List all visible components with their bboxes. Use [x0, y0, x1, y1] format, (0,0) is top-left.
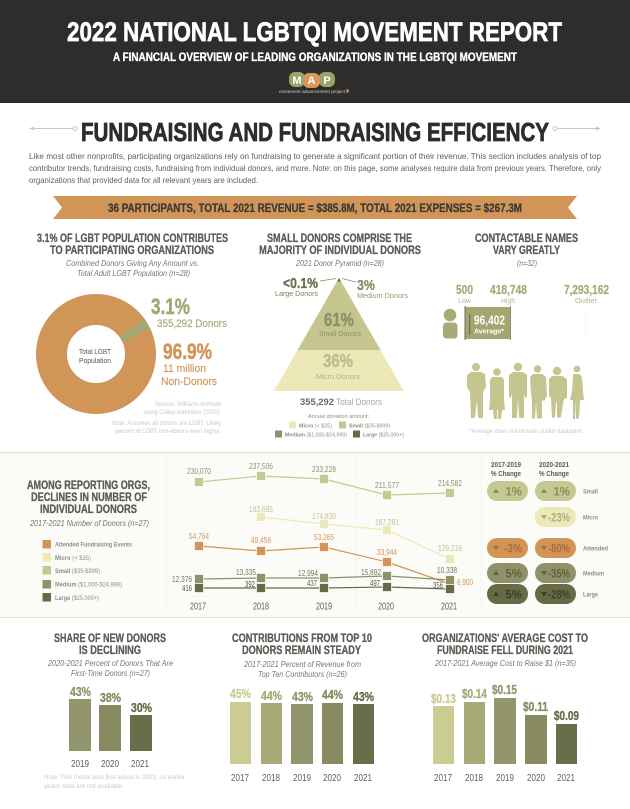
heading [37, 233, 228, 278]
pill row: large: 5% [505, 590, 522, 602]
pill row: small: 1% [505, 486, 522, 498]
pyramid chart: Small Donors [319, 329, 361, 338]
legend [42, 540, 132, 602]
heading: FUNDRAISE FELL DURING 2021 [437, 645, 573, 657]
bar chart: 2017 [434, 773, 452, 784]
heading: Total Adult LGBT Population (n=28) [77, 268, 190, 278]
series: large donors: 497 [370, 579, 380, 588]
heading: CONTACTABLE NAMES [475, 233, 578, 245]
pill row: small: 1% [553, 486, 570, 498]
bar chart: 2019 [71, 759, 89, 770]
heading: 2017-2021 Average Cost to Raise $1 (n=35) [434, 658, 576, 668]
icon: person [443, 309, 458, 338]
pill row: small [487, 481, 598, 501]
pyramid chart: Micro Donors [316, 372, 360, 381]
pill row: micro: -23% [548, 512, 570, 524]
percent change pills: 2017-2019 [491, 460, 521, 469]
legend: Micro (< $35) [55, 555, 91, 562]
footnote: *Average does not include outlier datapoint. [469, 428, 583, 435]
pyramid chart: <0.1% [283, 275, 318, 292]
pill row: attended: -80% [548, 544, 570, 556]
series: medium donors: 10,338 [437, 566, 457, 575]
heading: TO PARTICIPATING ORGANIZATIONS [50, 245, 214, 257]
heading: 3.1% OF LGBT POPULATION CONTRIBUTES [37, 233, 228, 245]
percent change pills [487, 460, 608, 604]
series: attended fundraising events: 6,900 [457, 578, 473, 587]
bar chart [69, 684, 152, 770]
low high outlier figures: High [501, 296, 515, 305]
series: small donors [187, 462, 462, 500]
series: micro donors: 174,839 [312, 512, 336, 521]
bar chart: 38% [100, 690, 121, 705]
bar chart: $0.13 [431, 691, 456, 706]
pyramid legend [275, 414, 404, 438]
bar chart: 2020 [527, 773, 545, 784]
series: small donors: 211,577 [375, 481, 399, 490]
donor figures: Non-Donors [161, 376, 217, 388]
heading: ORGANIZATIONS' AVERAGE COST TO [422, 633, 588, 645]
x axis years [190, 602, 457, 612]
bar chart: 2019 [293, 773, 311, 784]
heading: VARY GREATLY [493, 245, 560, 257]
logo: MAP: M [292, 75, 302, 87]
series: micro donors [249, 505, 462, 564]
bar chart: 45% [230, 686, 251, 701]
intro paragraph: Like most other nonprofits, participating organizations rely on fundraising to generate a significant portion of their revenue. This section includes analysis of top [29, 151, 601, 161]
low high outlier figures [456, 282, 609, 305]
percent change pills: % Change [539, 469, 569, 478]
icon: six people silhouettes [467, 363, 584, 419]
series: medium donors [172, 566, 457, 584]
note: Note: This metric was first asked in 2019, so earlier [44, 774, 186, 781]
heading: Combined Donors Giving Any Amount vs. [66, 258, 199, 268]
heading: CONTRIBUTIONS FROM TOP 10 [232, 633, 372, 645]
ribbon banner: 36 PARTICIPANTS, TOTAL 2021 REVENUE = $385.8M, TOTAL 2021 EXPENSES = $267.3M [108, 201, 522, 215]
pyramid chart: 3% [357, 277, 375, 294]
subtitle: A FINANCIAL OVERVIEW OF LEADING ORGANIZATIONS IN THE LGBTQI MOVEMENT [113, 52, 517, 64]
average bar: 96,402 [474, 314, 505, 328]
series: small donors: 237,506 [249, 462, 273, 471]
heading: 2017-2021 Number of Donors (n=27) [29, 518, 149, 528]
pyramid legend: Medium ($1,000-$24,999) [285, 432, 347, 438]
intro paragraph: organizations that provided data for all relevant years are included. [29, 175, 258, 185]
donor figures: 11 million [163, 363, 206, 375]
series: attended fundraising events: 54,764 [189, 532, 209, 541]
pyramid chart: 61% [324, 310, 354, 330]
x axis years: 2019 [316, 602, 332, 612]
pill row: attended: Attended [583, 546, 608, 552]
heading: SMALL DONORS COMPRISE THE [267, 233, 412, 245]
line chart [172, 462, 473, 612]
donor figures: 96.9% [163, 339, 212, 364]
pill row: large [487, 584, 598, 604]
x axis years: 2020 [378, 602, 394, 612]
bar chart: 2017 [231, 773, 249, 784]
bar chart: 2020 [101, 759, 119, 770]
heading [475, 233, 578, 268]
note [44, 774, 186, 790]
ribbon banner [53, 196, 577, 219]
pill row: micro: Micro [583, 514, 598, 522]
series: medium donors: 13,335 [236, 568, 256, 577]
series: small donors: 230,070 [187, 467, 211, 476]
bar chart: 2018 [262, 773, 280, 784]
low high outlier figures: 7,293,162 [564, 282, 609, 297]
series: micro donors: 167,281 [375, 518, 399, 527]
series: micro donors: 129,216 [438, 544, 462, 553]
pyramid legend: Annual donation amount: [308, 414, 369, 420]
pill row: attended [487, 538, 608, 558]
series: micro donors: 183,695 [249, 505, 273, 514]
bar chart: $0.15 [492, 682, 517, 697]
donut chart [52, 310, 150, 398]
pill row: medium: -35% [548, 568, 570, 580]
intro paragraph [29, 151, 602, 185]
series: attended fundraising events: 53,265 [314, 533, 334, 542]
pyramid chart: Total Donors [336, 397, 382, 408]
panel: share of new donors [44, 633, 186, 790]
heading: DECLINES IN NUMBER OF [31, 492, 147, 504]
pill row: large: -28% [548, 590, 570, 602]
heading: (n=32) [517, 258, 537, 268]
header band [0, 0, 630, 103]
legend: Large ($25,000+) [55, 595, 99, 602]
pyramid legend: Large ($25,000+) [363, 432, 404, 438]
pill row: large: Large [583, 592, 598, 598]
series: medium donors: 12,994 [298, 569, 318, 578]
heading: First-Time Donors (n=27) [71, 668, 150, 678]
x axis years: 2017 [190, 602, 206, 612]
pyramid chart: Large Donors [275, 289, 318, 298]
percent change pills: 2020-2021 [539, 460, 569, 469]
heading: 2017-2021 Percent of Revenue from [243, 659, 361, 669]
heading [232, 633, 372, 679]
legend: Small ($35-$999) [55, 568, 100, 575]
series: medium donors: 12,376 [172, 575, 192, 584]
source note: using Gallup estimates (2020). [144, 409, 221, 416]
heading: 2020-2021 Percent of Donors That Are [47, 658, 173, 668]
series: large donors: 392 [245, 580, 255, 589]
donor figures: 3.1% [151, 294, 190, 319]
pyramid chart: 355,292 [300, 397, 334, 408]
panel: donor pyramid [259, 233, 421, 438]
logo: MAP [279, 72, 350, 94]
bar chart: 2021 [354, 773, 372, 784]
bar chart: 43% [292, 689, 313, 704]
low high outlier figures: Low [458, 296, 472, 305]
bar chart: 2020 [323, 773, 341, 784]
donut chart: Total LGBT [79, 347, 111, 356]
heading: IS DECLINING [79, 645, 141, 657]
donut chart: Population [79, 356, 111, 365]
pill row: medium [487, 563, 604, 583]
heading [27, 480, 150, 528]
source note: Source: Williams Institute [155, 401, 221, 408]
pyramid legend: Small ($35-$999) [349, 424, 390, 430]
bar chart: 43% [70, 684, 91, 699]
low high outlier figures: 500 [456, 282, 473, 297]
bar chart: 2018 [465, 773, 483, 784]
x axis years: 2021 [441, 602, 457, 612]
panel: top 10 donor contributions [230, 633, 374, 784]
bar chart: 2019 [496, 773, 514, 784]
low high outlier figures: Outlier [575, 296, 597, 305]
bar chart: 30% [131, 700, 152, 715]
bar chart [230, 686, 374, 784]
legend: Medium ($1,000-$24,999) [55, 582, 122, 588]
bar chart: 44% [261, 688, 282, 703]
pyramid chart: Medium Donors [357, 291, 408, 300]
donor figures: 355,292 Donors [157, 318, 227, 330]
logo: MAP: P [323, 75, 331, 87]
series: large donors: 437 [307, 579, 317, 588]
pyramid legend: Micro (< $35) [299, 424, 332, 430]
series: attended fundraising events [189, 532, 473, 587]
panel: contactable names [443, 233, 609, 435]
heading: 2021 Donor Pyramid (n=28) [295, 258, 384, 268]
note: years' data are not available. [44, 783, 124, 790]
bar chart: $0.09 [554, 708, 579, 723]
heading: SHARE OF NEW DONORS [54, 633, 166, 645]
series: large donors [182, 579, 454, 594]
x axis years: 2018 [253, 602, 269, 612]
bar chart: 2021 [131, 759, 149, 770]
donor figures [151, 294, 227, 388]
panel: number of individual donors [0, 452, 630, 618]
low high outlier figures: 418,748 [490, 282, 527, 297]
heading [47, 633, 173, 678]
average bar [464, 306, 586, 340]
series: large donors: 356 [433, 581, 443, 590]
heading: AMONG REPORTING ORGS, [27, 480, 150, 492]
bar chart: 43% [353, 689, 374, 704]
legend: Attended Fundraising Events [55, 542, 132, 548]
logo: MAP: A [308, 75, 316, 87]
pyramid chart [274, 275, 408, 408]
pill row: medium: Medium [583, 570, 604, 578]
source note [112, 401, 222, 435]
heading [422, 633, 588, 668]
series: small donors: 233,228 [312, 465, 336, 474]
pill row: micro [535, 507, 598, 527]
source note: percent of LGBT non-donors even higher. [115, 428, 221, 435]
pill row: small: Small [583, 488, 598, 496]
source note: Note: Assumes all donors are LGBT. Likely [112, 420, 222, 427]
average bar: Average* [474, 326, 504, 336]
panel: LGBT population donut [37, 233, 228, 435]
logo: MAP: movement advancement project [279, 89, 346, 94]
pyramid chart: 36% [323, 351, 353, 371]
series: attended fundraising events: 33,944 [377, 548, 397, 557]
series: attended fundraising events: 49,456 [251, 536, 271, 545]
heading: DONORS REMAIN STEADY [242, 645, 361, 657]
bar chart: 2021 [557, 773, 575, 784]
series: large donors: 416 [182, 584, 192, 593]
heading [259, 233, 421, 268]
series: small donors: 214,582 [438, 479, 462, 488]
pill row: attended: -3% [504, 544, 522, 556]
heading: MAJORITY OF INDIVIDUAL DONORS [259, 245, 421, 257]
heading: INDIVIDUAL DONORS [40, 504, 137, 516]
series: medium donors: 15,892 [361, 568, 381, 577]
bar chart: $0.11 [523, 699, 548, 714]
panel: average cost to fundraise [422, 633, 588, 784]
bar chart: 44% [322, 687, 343, 702]
bar chart [431, 682, 579, 784]
heading: Top Ten Contributors (n=26) [258, 669, 347, 679]
pill row: medium: 5% [505, 568, 522, 580]
bar chart: $0.14 [462, 686, 488, 701]
percent change pills: % Change [491, 469, 521, 478]
